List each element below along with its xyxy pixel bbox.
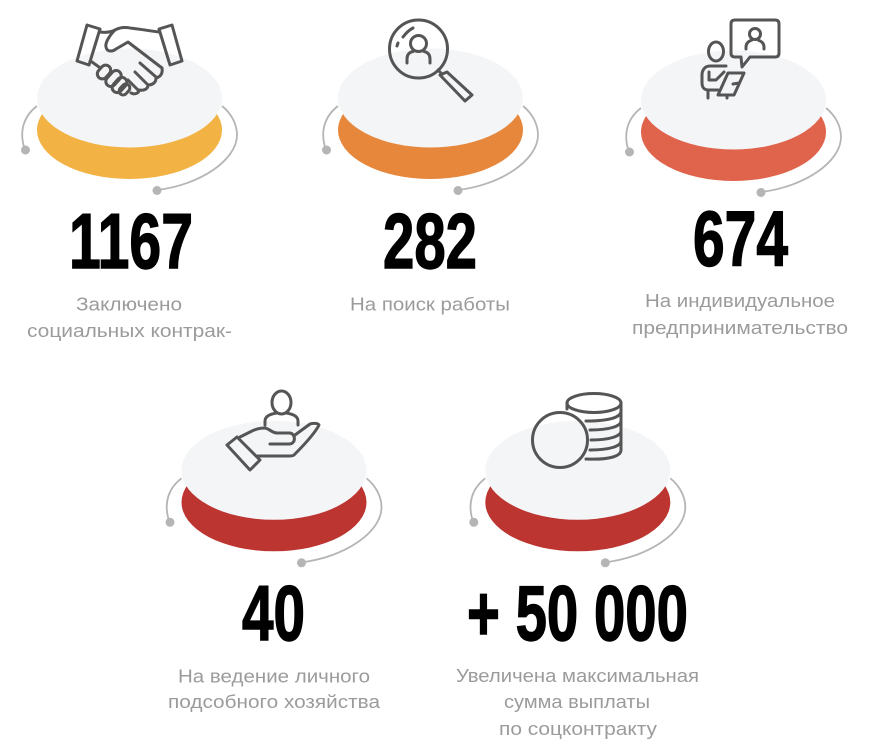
panel: job search	[322, 20, 538, 314]
label: job search: На поиск работы	[350, 294, 510, 314]
number: 674: 674	[693, 194, 788, 282]
podium: red	[469, 421, 685, 567]
panel: entrepreneurship	[625, 20, 848, 338]
icon: hand holding person	[227, 391, 319, 470]
label: maximum payment increased: сумма выплаты	[504, 691, 650, 712]
label: entrepreneurship: На индивидуальное	[645, 290, 835, 311]
label: maximum payment increased: Увеличена максимальная	[456, 665, 699, 686]
label: maximum payment increased	[456, 665, 699, 739]
label: contracts concluded	[27, 294, 232, 341]
icon: person with speech bubble	[702, 20, 779, 98]
label: personal farming: подсобного хозяйства	[168, 691, 381, 712]
panel: personal farming	[166, 391, 382, 712]
number: 40: 40	[242, 569, 305, 657]
podium: coral	[625, 50, 841, 197]
icon: magnifier with person	[390, 20, 472, 101]
label: contracts concluded: Заключено	[76, 294, 182, 314]
label: contracts concluded: социальных контрак-	[27, 320, 232, 341]
panel: maximum payment increased	[456, 394, 699, 739]
number: 1167: 1167	[69, 197, 193, 285]
icon: handshake	[77, 25, 182, 97]
panel: contracts concluded	[21, 25, 237, 341]
podium: red	[166, 421, 382, 567]
podium: yellow	[21, 48, 237, 195]
podium: orange	[322, 48, 538, 195]
number: +50 000: + 50 000	[467, 569, 688, 657]
icon: coins	[532, 394, 621, 468]
label: personal farming	[168, 666, 381, 712]
number: 282: 282	[383, 197, 477, 285]
label: personal farming: На ведение личного	[178, 666, 370, 686]
label: maximum payment increased: по соцконтракту	[499, 718, 658, 739]
label: entrepreneurship	[632, 290, 848, 338]
label: entrepreneurship: предпринимательство	[632, 317, 848, 338]
